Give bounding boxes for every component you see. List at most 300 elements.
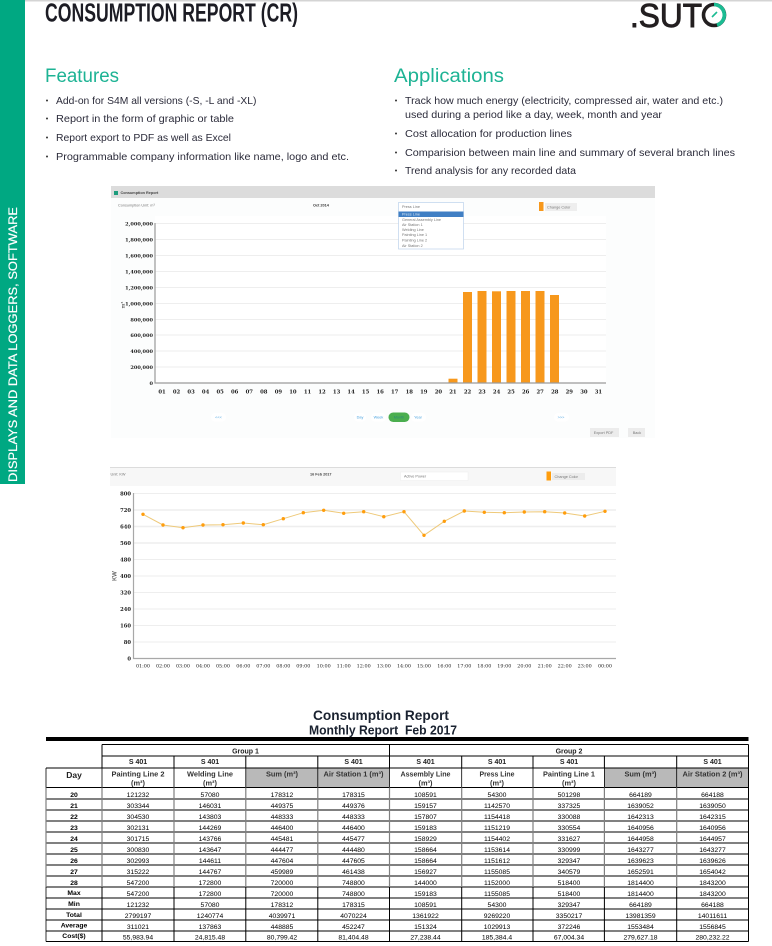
list: features bbox=[46, 96, 349, 163]
sensor headers: S 401 bbox=[129, 759, 147, 766]
table values: 143647 bbox=[199, 847, 222, 854]
table values: 447604 bbox=[271, 858, 294, 865]
table values: 501298 bbox=[558, 792, 581, 799]
legend: change color: Change Color bbox=[547, 205, 571, 209]
column headers: Assembly Line bbox=[400, 770, 450, 778]
y axis unit: m³ bbox=[120, 302, 126, 308]
table values: 1639623 bbox=[627, 858, 654, 865]
x axis labels: 04:00 bbox=[196, 664, 210, 670]
side band: section label: DISPLAYS AND DATA LOGGERS, SOFTWARE bbox=[6, 207, 20, 482]
x axis labels: 30 bbox=[580, 390, 588, 396]
table values: Total bbox=[66, 912, 82, 919]
table values: 121232 bbox=[127, 792, 150, 799]
list: applications: used during a period like a day, week, month and year bbox=[405, 110, 663, 121]
x axis labels: 22:00 bbox=[558, 664, 572, 670]
y axis labels: 2,000,000 bbox=[125, 222, 154, 228]
table values: 27,238.44 bbox=[410, 934, 441, 941]
table values: 1361922 bbox=[412, 913, 439, 920]
table values: 151324 bbox=[414, 924, 437, 931]
table values: 448333 bbox=[271, 814, 294, 821]
table values: 67,004.34 bbox=[554, 934, 584, 941]
panel: features bbox=[45, 66, 349, 163]
table values: 55,983.94 bbox=[123, 934, 153, 941]
y axis labels bbox=[125, 222, 154, 387]
x axis labels: 16 bbox=[377, 390, 384, 396]
table values: 143766 bbox=[199, 836, 222, 843]
table values: 4070224 bbox=[340, 913, 367, 920]
table values: 1556845 bbox=[699, 924, 726, 931]
panel: monthly consumption bar chart screenshot: Consumption Report bbox=[120, 191, 159, 195]
list: applications: Track how much energy (electricity, compressed air, water and etc.) bbox=[405, 96, 723, 107]
table values: 1240774 bbox=[197, 913, 223, 920]
x axis labels: 01:00 bbox=[136, 664, 150, 670]
dropdown: line selector: Air Station 1 bbox=[402, 223, 423, 227]
dropdown: line selector: Press Line bbox=[402, 212, 420, 216]
y axis labels: 640 bbox=[120, 524, 131, 530]
table values: Cost($) bbox=[62, 933, 86, 940]
sensor headers bbox=[129, 759, 722, 766]
x axis labels: 01 bbox=[158, 390, 166, 396]
table values: 24,815.48 bbox=[195, 934, 225, 941]
column headers: (m³) bbox=[203, 778, 218, 788]
x axis labels: 10 bbox=[289, 390, 297, 396]
table values: 1153614 bbox=[484, 847, 510, 854]
y axis labels: 0 bbox=[127, 656, 131, 662]
table values: 144000 bbox=[414, 880, 437, 887]
panel: monthly consumption bar chart screenshot bbox=[111, 186, 655, 438]
x axis labels: 21:00 bbox=[538, 664, 552, 670]
dropdown: line selector bbox=[398, 202, 464, 249]
y axis labels: 560 bbox=[120, 541, 131, 547]
table values: 25 bbox=[70, 847, 78, 854]
table values: 448885 bbox=[271, 924, 294, 931]
table values: 1643277 bbox=[627, 847, 654, 854]
x axis labels: 07 bbox=[246, 390, 253, 396]
table values: 57080 bbox=[201, 902, 220, 909]
table rules bbox=[46, 744, 748, 942]
x axis labels: 08:00 bbox=[276, 664, 290, 670]
table values: 1644957 bbox=[699, 836, 726, 843]
table values: 172800 bbox=[199, 891, 222, 898]
y axis labels: 320 bbox=[120, 590, 131, 596]
controls: period buttons: Week bbox=[374, 416, 383, 420]
column headers bbox=[66, 770, 743, 788]
controls: period buttons: Year bbox=[414, 416, 423, 420]
x axis labels: 12:00 bbox=[357, 664, 371, 670]
x axis labels: 20:00 bbox=[517, 664, 531, 670]
x axis labels bbox=[136, 664, 612, 670]
controls: period buttons: Day bbox=[357, 416, 363, 420]
x axis labels: 02:00 bbox=[156, 664, 170, 670]
list: applications bbox=[395, 96, 735, 177]
table values: 446400 bbox=[271, 825, 294, 832]
table values: 143803 bbox=[199, 814, 222, 821]
panel: monthly consumption bar chart screenshot: Oct 2014 bbox=[313, 204, 330, 208]
list: features: Report in the form of graphic or table bbox=[56, 114, 234, 125]
column headers: Day bbox=[66, 770, 82, 780]
table values: Average bbox=[61, 922, 88, 930]
table values: 448333 bbox=[342, 814, 365, 821]
table values: 447605 bbox=[342, 858, 365, 865]
dropdown: line selector: Painting Line 1 bbox=[402, 233, 427, 237]
table values: 57080 bbox=[201, 792, 220, 799]
table values: 459989 bbox=[271, 869, 294, 876]
sensor headers: S 401 bbox=[488, 759, 506, 766]
x axis labels: 07:00 bbox=[256, 664, 270, 670]
y axis labels: 200,000 bbox=[130, 365, 154, 371]
chart gridlines bbox=[133, 494, 616, 642]
x axis labels: 13:00 bbox=[377, 664, 391, 670]
y axis labels: 1,800,000 bbox=[125, 238, 154, 244]
table values: 159157 bbox=[414, 803, 437, 810]
table values: 1814400 bbox=[627, 891, 654, 898]
table values bbox=[61, 792, 730, 941]
table values: 1644958 bbox=[627, 836, 654, 843]
x axis labels: 12 bbox=[318, 390, 326, 396]
y axis labels: 1,200,000 bbox=[125, 286, 154, 292]
y axis labels: 0 bbox=[150, 381, 154, 387]
sensor headers: S 401 bbox=[703, 759, 722, 766]
table values: 1640956 bbox=[627, 825, 654, 832]
table values: 1155085 bbox=[484, 869, 510, 876]
table values: 144767 bbox=[199, 869, 222, 876]
table values: Max bbox=[67, 890, 81, 897]
group headers: Group 1 bbox=[232, 748, 259, 756]
table values: 26 bbox=[70, 858, 78, 865]
table values: 449376 bbox=[342, 803, 365, 810]
table values: 54300 bbox=[488, 902, 507, 909]
y axis labels: 240 bbox=[120, 607, 131, 613]
x axis labels: 05 bbox=[217, 390, 224, 396]
table values: 4039971 bbox=[269, 913, 295, 920]
table values: 81,404.48 bbox=[338, 934, 369, 941]
table values: 1553484 bbox=[627, 924, 654, 931]
table values: 1639050 bbox=[699, 803, 726, 810]
dropdown: line selector: Welding Line bbox=[402, 228, 424, 232]
x axis labels: 20 bbox=[435, 390, 442, 396]
dropdown: line selector: General Assembly Line bbox=[402, 218, 441, 222]
panel: daily active power line chart screenshot bbox=[110, 467, 616, 670]
column headers: (m³) bbox=[490, 778, 505, 788]
panel: daily active power line chart screenshot: Unit: KW bbox=[110, 472, 126, 476]
table values: 1152000 bbox=[484, 880, 510, 887]
table values: 1843200 bbox=[699, 880, 726, 887]
legend: change color bbox=[546, 472, 585, 480]
x axis labels: 14 bbox=[347, 390, 355, 396]
table values: 185,384.4 bbox=[482, 934, 512, 941]
y axis labels: 400,000 bbox=[130, 349, 154, 355]
table values: 748800 bbox=[342, 891, 365, 898]
y axis labels: 720 bbox=[120, 508, 131, 514]
table values: 2799197 bbox=[125, 913, 151, 920]
icon: gauge bbox=[704, 4, 724, 26]
dropdown: line selector: Press Line bbox=[402, 205, 420, 209]
column headers: Sum (m³) bbox=[624, 770, 657, 778]
table values: 445477 bbox=[342, 836, 365, 843]
y axis labels: 800 bbox=[120, 492, 131, 498]
table values: 1814400 bbox=[627, 880, 654, 887]
table values: 330554 bbox=[558, 825, 581, 832]
controls: export and back buttons: Back bbox=[633, 431, 641, 435]
list: features: Add-on for S4M all versions (-S, -L and -XL) bbox=[56, 96, 256, 107]
x axis labels: 28 bbox=[551, 390, 559, 396]
table values: 1654042 bbox=[699, 869, 726, 876]
table values: 302131 bbox=[127, 825, 150, 832]
group headers bbox=[232, 748, 583, 756]
table values: 1151612 bbox=[484, 858, 510, 865]
table values: 1642315 bbox=[699, 814, 726, 821]
controls: export and back buttons bbox=[590, 428, 645, 437]
column headers: Press Line bbox=[480, 770, 514, 778]
list: features: Report export to PDF as well as Excel bbox=[56, 133, 231, 144]
list: applications: Comparision between main line and summary of several branch lines bbox=[405, 148, 735, 159]
data line bbox=[143, 510, 605, 535]
controls: period buttons: <<< bbox=[215, 416, 223, 420]
table header fills bbox=[246, 768, 748, 788]
column headers: Painting Line 1 bbox=[543, 770, 595, 778]
x axis labels: 00:00 bbox=[598, 664, 612, 670]
list: applications: Cost allocation for production lines bbox=[405, 129, 572, 140]
table values: 144611 bbox=[199, 858, 221, 865]
table values: 279,627.18 bbox=[623, 934, 658, 941]
table values: 28 bbox=[70, 880, 78, 887]
table values: 172800 bbox=[199, 880, 222, 887]
sensor headers: S 401 bbox=[560, 759, 578, 766]
x axis labels: 06:00 bbox=[236, 664, 250, 670]
table values: 1643277 bbox=[699, 847, 726, 854]
x axis labels: 15:00 bbox=[417, 664, 431, 670]
table values: 446400 bbox=[342, 825, 365, 832]
table values: 158664 bbox=[414, 847, 437, 854]
table values: 1155085 bbox=[484, 891, 510, 898]
table values: 178312 bbox=[271, 792, 294, 799]
y axis labels bbox=[120, 492, 131, 662]
x axis labels: 04 bbox=[202, 390, 210, 396]
y axis labels: 1,400,000 bbox=[125, 270, 154, 276]
x axis labels: 08 bbox=[260, 390, 268, 396]
table values: 1639626 bbox=[699, 858, 726, 865]
sensor headers: S 401 bbox=[416, 759, 435, 766]
column headers: Sum (m³) bbox=[266, 770, 299, 778]
dropdown: line selector: Air Station 2 bbox=[402, 244, 423, 248]
x axis labels: 14:00 bbox=[397, 664, 411, 670]
x axis labels: 31 bbox=[595, 390, 602, 396]
table values: 518400 bbox=[558, 891, 581, 898]
x axis labels: 09 bbox=[275, 390, 282, 396]
table values: 137863 bbox=[199, 924, 222, 931]
column headers: (m³) bbox=[131, 778, 146, 788]
table values: Min bbox=[68, 901, 80, 908]
sensor headers: S 401 bbox=[201, 759, 219, 766]
table values: 158929 bbox=[414, 836, 437, 843]
column headers: Air Station 2 (m³) bbox=[682, 770, 743, 778]
table values: 1154418 bbox=[484, 814, 510, 821]
table values: 330999 bbox=[558, 847, 581, 854]
y axis labels: 400 bbox=[120, 574, 131, 580]
x axis labels: 27 bbox=[537, 390, 544, 396]
table values: 1652591 bbox=[627, 869, 654, 876]
table values: 301715 bbox=[127, 836, 150, 843]
x axis labels: 17:00 bbox=[457, 664, 471, 670]
group headers: Group 2 bbox=[556, 748, 583, 756]
data points bbox=[141, 509, 607, 537]
table values: 1640956 bbox=[699, 825, 726, 832]
table values: 1154402 bbox=[484, 836, 510, 843]
table values: 178315 bbox=[342, 902, 365, 909]
table values: 24 bbox=[70, 836, 78, 843]
table values: 664189 bbox=[629, 792, 652, 799]
column headers: Painting Line 2 bbox=[112, 770, 164, 778]
table values: 27 bbox=[70, 869, 78, 876]
chart gridlines bbox=[155, 224, 606, 367]
table values: 748800 bbox=[342, 880, 365, 887]
table values: 372246 bbox=[558, 924, 581, 931]
x axis labels: 06 bbox=[231, 390, 239, 396]
table values: 331627 bbox=[558, 836, 581, 843]
table values: 444480 bbox=[342, 847, 365, 854]
table values: 80,799.42 bbox=[267, 934, 297, 941]
table values: 23 bbox=[70, 825, 78, 832]
y axis labels: 800,000 bbox=[130, 318, 154, 324]
column headers: (m³) bbox=[419, 778, 433, 788]
heading: applications: Applications bbox=[394, 66, 504, 87]
dropdown: active power: Active Power bbox=[404, 474, 427, 478]
table values: 311021 bbox=[127, 924, 149, 931]
table values: 178312 bbox=[271, 902, 294, 909]
table values: 1639052 bbox=[627, 803, 654, 810]
x axis labels: 11 bbox=[304, 390, 311, 396]
table values: 315222 bbox=[127, 869, 150, 876]
table values: 144269 bbox=[199, 825, 222, 832]
report title: Consumption Report bbox=[313, 707, 449, 723]
panel: daily active power line chart screenshot: 16 Feb 2017 bbox=[310, 472, 332, 476]
x axis labels: 03:00 bbox=[176, 664, 190, 670]
table values: 1029913 bbox=[484, 924, 510, 931]
table values: 280,232.22 bbox=[695, 934, 730, 941]
table values: 445481 bbox=[271, 836, 294, 843]
table values: 146031 bbox=[199, 803, 222, 810]
side band: section label bbox=[0, 0, 25, 484]
table values: 300830 bbox=[127, 847, 150, 854]
controls: period buttons: Month bbox=[394, 416, 404, 420]
table values: 337325 bbox=[558, 803, 581, 810]
controls: period buttons bbox=[211, 412, 569, 422]
table values: 159183 bbox=[414, 825, 437, 832]
x axis labels: 11:00 bbox=[337, 664, 351, 670]
table values: 452247 bbox=[342, 924, 365, 931]
table values: 461438 bbox=[342, 869, 365, 876]
x axis labels: 03 bbox=[187, 390, 195, 396]
table values: 720000 bbox=[271, 891, 294, 898]
y axis labels: 80 bbox=[124, 640, 131, 646]
table values: 13981359 bbox=[625, 913, 656, 920]
table values: 449375 bbox=[271, 803, 294, 810]
table values: 121232 bbox=[127, 902, 150, 909]
x axis labels: 15 bbox=[362, 390, 370, 396]
controls: period buttons: >>> bbox=[558, 416, 565, 420]
x axis labels: 09:00 bbox=[296, 664, 310, 670]
table values: 158664 bbox=[414, 858, 437, 865]
column headers: Air Station 1 (m³) bbox=[324, 770, 384, 778]
y axis labels: 1,000,000 bbox=[125, 302, 154, 308]
x axis labels: 23:00 bbox=[578, 664, 592, 670]
table values: 3350217 bbox=[556, 913, 582, 920]
y axis labels: 600,000 bbox=[130, 333, 154, 339]
report title bbox=[309, 707, 457, 738]
x axis labels: 16:00 bbox=[437, 664, 451, 670]
report title: Monthly Report Feb 2017 bbox=[309, 724, 457, 738]
x axis labels: 19 bbox=[420, 390, 428, 396]
table values: 547200 bbox=[127, 891, 150, 898]
table values: 1142570 bbox=[484, 803, 510, 810]
table values: 547200 bbox=[127, 880, 150, 887]
y axis labels: 1,600,000 bbox=[125, 254, 154, 260]
x axis labels: 13 bbox=[333, 390, 341, 396]
table values: 664189 bbox=[629, 902, 652, 909]
list: applications: Trend analysis for any recorded data bbox=[405, 166, 576, 177]
table values: 329347 bbox=[558, 858, 581, 865]
panel: monthly consumption bar chart screenshot: Consumption Unit: m³ bbox=[118, 204, 155, 208]
table values: 304530 bbox=[127, 814, 150, 821]
y axis unit: KW bbox=[112, 571, 118, 581]
table values: 54300 bbox=[488, 792, 507, 799]
table values: 330088 bbox=[558, 814, 581, 821]
sensor headers: S 401 bbox=[344, 759, 363, 766]
table values: 159183 bbox=[414, 891, 437, 898]
x axis labels: 24 bbox=[493, 390, 501, 396]
table values: 720000 bbox=[271, 880, 294, 887]
x axis labels bbox=[158, 390, 602, 396]
x axis labels: 22 bbox=[464, 390, 471, 396]
table values: 444477 bbox=[271, 847, 294, 854]
table values: 1843200 bbox=[699, 891, 726, 898]
legend: change color bbox=[539, 202, 577, 211]
bars bbox=[448, 291, 559, 383]
dropdown: active power bbox=[400, 472, 468, 480]
table values: 108591 bbox=[414, 902, 437, 909]
heading: features: Features bbox=[45, 66, 119, 87]
x axis labels: 10:00 bbox=[317, 664, 331, 670]
controls: export and back buttons: Export PDF bbox=[594, 431, 614, 435]
column headers: (m³) bbox=[562, 778, 577, 788]
x axis labels: 17 bbox=[391, 390, 399, 396]
y axis labels: 160 bbox=[120, 624, 131, 630]
table values: 1151219 bbox=[484, 825, 510, 832]
x axis labels: 25 bbox=[507, 390, 515, 396]
panel: applications bbox=[394, 66, 735, 177]
legend: change color: Change Color bbox=[554, 475, 579, 479]
x axis labels: 29 bbox=[566, 390, 573, 396]
x axis labels: 21 bbox=[449, 390, 457, 396]
list: features: Programmable company information like name, logo and etc. bbox=[56, 152, 349, 163]
table values: 178315 bbox=[342, 792, 365, 799]
table values: 157807 bbox=[414, 814, 437, 821]
table values: 303344 bbox=[127, 803, 150, 810]
x axis labels: 02 bbox=[173, 390, 180, 396]
x axis labels: 18 bbox=[406, 390, 413, 396]
table values: 302993 bbox=[127, 858, 150, 865]
table values: 108591 bbox=[414, 792, 437, 799]
table values: 156927 bbox=[414, 869, 437, 876]
table values: 340579 bbox=[558, 869, 581, 876]
table values: 329347 bbox=[558, 902, 581, 909]
table values: 1642313 bbox=[627, 814, 654, 821]
x axis labels: 23 bbox=[478, 390, 486, 396]
table: monthly report bbox=[46, 737, 748, 942]
column headers: Welding Line bbox=[187, 770, 233, 778]
x axis labels: 19:00 bbox=[497, 664, 511, 670]
x axis labels: 05:00 bbox=[216, 664, 230, 670]
